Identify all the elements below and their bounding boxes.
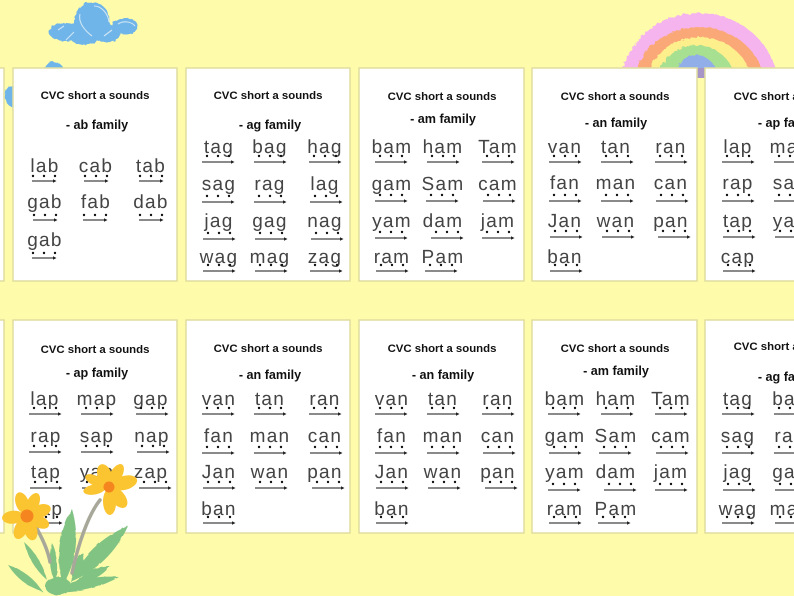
word: van: van [375,389,409,410]
word: tan: tan [255,389,285,410]
word: cap: cap [29,499,63,520]
word: tap: tap [31,462,61,483]
word: cap: cap [721,247,755,268]
word: cam: cam [478,174,518,195]
word: ban: ban [547,247,583,268]
word: gab second: gab [27,230,63,251]
word: Pam: Pam [422,247,464,268]
icon: daffodil plant [2,461,139,595]
heading: bottom second an family: - an family [412,368,474,382]
word: pan: pan [307,462,343,483]
word: jam [653,462,688,492]
word: pan: pan [480,462,516,483]
word: ran: ran [309,389,341,410]
word: fan: fan [550,173,580,194]
word: ran: ran [655,137,687,158]
word: map: map [77,389,117,410]
panel: ap family bottom [13,320,177,533]
heading: bottom am card title: CVC short a sounds [561,343,669,355]
heading: ab card title: CVC short a sounds [41,90,149,102]
heading: bottom an family: - an family [239,368,301,382]
panel: partial card bottom left [0,320,4,533]
word: can: can [654,173,688,194]
word: sag: sag [721,426,755,447]
word: tan: tan [601,137,631,158]
word: Sam: Sam [595,426,637,447]
word: wan: wan [423,462,462,483]
word: hag: hag [307,137,343,158]
word: cab: cab [79,156,113,177]
panel: ag family bottom partial [705,320,794,533]
word: bam: bam [545,389,585,410]
heading: bottom am family: - am family [583,364,649,378]
icon: small cloud behind card [5,62,64,107]
word: can: can [308,426,342,447]
word: gag: gag [252,211,288,232]
leaves [8,509,128,595]
word: tab: tab [136,156,166,177]
word: can: can [481,426,515,447]
word: wag: wag [199,247,238,268]
heading: ag card title: CVC short a sounds [214,90,322,102]
panel: an family [532,68,697,281]
panel: ap family partial [705,68,794,281]
panel: am family bottom [532,320,697,533]
word: tan: tan [428,389,458,410]
word: Sam: Sam [422,174,464,195]
word: zap: zap [134,462,168,483]
panel: an family bottom two [359,320,524,533]
word: fan [202,426,234,455]
word: dab: dab [133,192,169,213]
word: zag: zag [308,247,342,268]
word: jam: jam [653,462,688,483]
word: wag: wag [718,499,757,520]
word: jag [722,462,756,492]
icon: blue cloud [49,2,138,45]
word: gam: gam [545,426,585,447]
word: bam: bam [372,137,412,158]
flower right [83,461,139,515]
stems [35,500,100,573]
word: ham: ham [423,137,463,158]
word: gap: gap [133,389,169,410]
heading: an family: - an family [585,116,647,130]
word: fab: fab [81,192,111,213]
word: gab: gab [27,192,63,213]
flower right center [104,482,114,492]
word: nag [307,211,344,241]
word: jag [203,211,236,241]
word: tag: tag [723,389,753,410]
word: ram: ram [547,499,583,520]
word: sag: sag [202,174,236,195]
word: van: van [548,137,582,158]
word: rap [722,173,754,203]
word: ran: ran [482,389,514,410]
word: jam: jam [480,211,515,232]
word: fan [375,426,408,455]
word: fan: fan [204,426,234,447]
panel: am family [359,68,524,281]
word: rap: rap [30,426,62,447]
word: lab: lab [30,156,60,177]
word: yam: yam [545,462,585,483]
panel: partial card top left [0,68,4,281]
word: Tam: Tam [478,137,518,158]
word: van: van [202,389,236,410]
word: dam: dam [423,211,463,232]
word: lag: lag [310,174,340,195]
word: ham: ham [596,389,636,410]
word: Jan: Jan [375,462,409,483]
heading: ab family: - ab family [66,118,128,132]
flower left [2,490,53,542]
word: man: man [423,426,463,447]
word: lap: lap [30,389,60,410]
word: man: man [596,173,636,194]
heading: an card title: CVC short a sounds [561,91,669,103]
icon: rainbow [622,12,776,78]
word: zap [134,462,172,490]
word: mag: mag [250,247,290,268]
word: pan: pan [653,211,689,232]
word: lap: lap [723,137,753,158]
heading: bottom ap family: - ap family [66,366,128,380]
word: fan [549,173,582,203]
word: tag: tag [204,137,234,158]
word: yam: yam [372,211,412,232]
word: nag: nag [307,211,343,232]
word: cam: cam [651,426,691,447]
heading: bottom second an card title: CVC short a sounds [388,343,496,355]
word: wan: wan [250,462,289,483]
word: sap: sap [80,426,114,447]
word: fan: fan [377,426,407,447]
word: nap: nap [134,426,170,447]
word: ban: ban [374,499,410,520]
word: wan: wan [596,211,635,232]
word: dam: dam [596,462,636,483]
heading: am family: - am family [410,112,476,126]
panel: an family bottom one [186,320,350,533]
word: rag [254,174,286,204]
word: lag [310,174,342,204]
heading: am card title: CVC short a sounds [388,91,496,103]
word: jag: jag [203,211,234,232]
word: gam: gam [372,174,412,195]
panel: ag family [186,68,350,281]
word: rag: rag [254,174,286,195]
word: bag: bag [252,137,288,158]
word: ban: ban [201,499,237,520]
heading: bottom ap card title: CVC short a sounds [41,344,149,356]
word: Jan: Jan [548,211,582,232]
word: ram: ram [374,247,410,268]
flower left center [20,510,34,522]
word: Tam: Tam [651,389,691,410]
word: tap: tap [723,211,753,232]
word: Pam: Pam [595,499,637,520]
word: jag: jag [722,462,753,483]
heading: ag family: - ag family [239,118,301,132]
panel: ab family [13,68,177,281]
word: man: man [250,426,290,447]
heading: bottom an card title: CVC short a sounds [214,343,322,355]
word: rap: rap [722,173,754,194]
word: Jan: Jan [202,462,236,483]
word: yap: yap [80,462,114,483]
